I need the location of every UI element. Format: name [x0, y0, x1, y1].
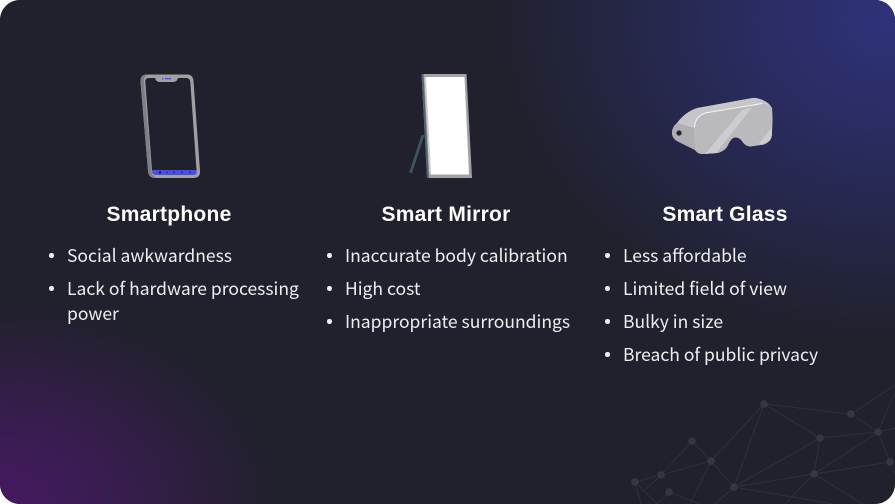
list: smartphone limitations: Social awkwardness — [67, 243, 232, 268]
list: smart mirror limitations — [327, 243, 570, 334]
list: smart glass limitations — [605, 243, 818, 367]
list: smart mirror limitations: Inappropriate surroundings — [345, 309, 570, 334]
list: smart glass limitations: Breach of public privacy — [623, 342, 818, 367]
list: smartphone limitations: Lack of hardware processing power — [67, 276, 299, 326]
list: smartphone limitations — [49, 243, 299, 326]
list: smart glass limitations: Limited field of view — [623, 276, 787, 301]
list: smart mirror limitations: Inaccurate body calibration — [345, 243, 568, 268]
heading: Smartphone: Smartphone — [106, 203, 232, 226]
list: smart glass limitations: Less affordable — [623, 243, 747, 268]
heading: Smart Glass: Smart Glass — [662, 203, 788, 226]
list: smart glass limitations: Bulky in size — [623, 309, 723, 334]
heading: Smart Mirror: Smart Mirror — [381, 203, 511, 226]
list: smart mirror limitations: High cost — [345, 276, 420, 301]
